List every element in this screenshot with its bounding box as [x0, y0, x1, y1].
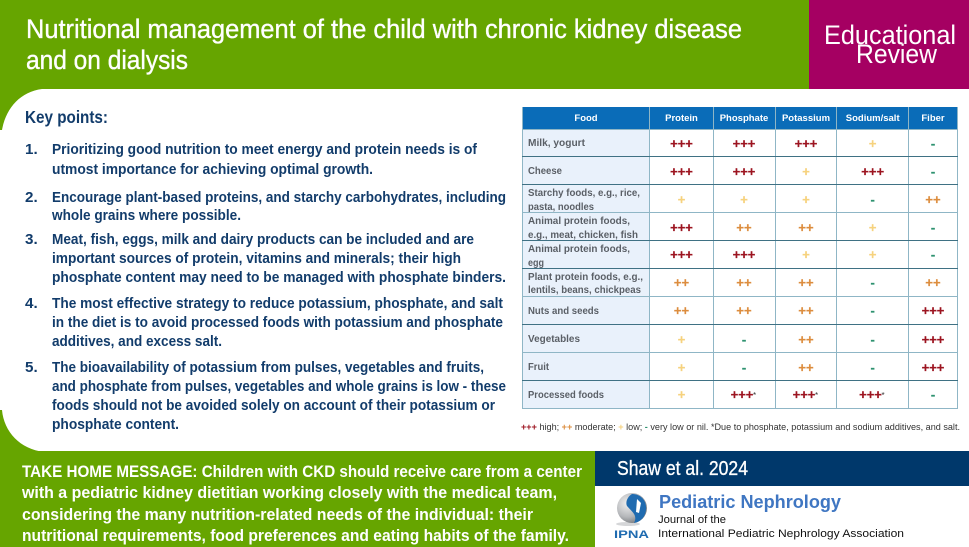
- table header row: [522, 107, 958, 129]
- table legend: +++ high; ++ moderate; + low; - very low or nil. *Due to phosphate, potassium and sodium additives, and salt.: [521, 422, 960, 432]
- key point 2: 2.: [25, 189, 38, 206]
- icon: IPNA globe: [616, 493, 647, 526]
- key point 2: Encourage plant-based proteins, and starchy carbohydrates, including: [52, 189, 506, 206]
- row: starchy foods: +: [802, 192, 810, 207]
- row: plant protein foods: lentils, beans, chickpeas: [528, 285, 642, 296]
- row: processed foods: +++: [859, 387, 882, 402]
- key point 5: 5.: [25, 359, 38, 376]
- row: milk, yogurt: [528, 136, 935, 151]
- row: nuts and seeds: ++: [736, 303, 752, 318]
- key point 3: phosphate content may need to be managed with phosphate binders.: [52, 269, 506, 286]
- row: animal protein foods, meat: [528, 216, 935, 241]
- heading: key points: Key points:: [25, 107, 108, 127]
- row: cheese: +++: [733, 164, 756, 179]
- panel: take home message: [0, 451, 595, 547]
- key point 5: The bioavailability of potassium from pulses, vegetables and fruits,: [52, 359, 484, 376]
- key point 1: 1.: [25, 141, 38, 158]
- row: plant protein foods: ++: [736, 275, 752, 290]
- row: processed foods: +++: [731, 387, 754, 402]
- panel: take home message: with a pediatric kidney dietitian working closely with the medical team,: [21, 483, 557, 502]
- row: plant protein foods: ++: [925, 275, 941, 290]
- panel: take home message: considering the many nutrition-related needs of the individual: their: [22, 505, 533, 524]
- journal logo: Pediatric Nephrology: [614, 491, 904, 541]
- row: nuts and seeds: -: [871, 303, 875, 318]
- text: IPNA: IPNA: [614, 529, 649, 541]
- key point 1: utmost importance for achieving optimal growth.: [52, 161, 373, 178]
- row: vegetables: +++: [922, 332, 945, 347]
- key point 3: Meat, fish, eggs, milk and dairy products can be included and are: [52, 231, 474, 248]
- row: starchy foods: Starchy foods, e.g., rice,: [528, 188, 640, 199]
- row: fruit: Fruit: [528, 362, 550, 373]
- row: animal protein foods, egg: egg: [528, 258, 544, 269]
- key point 3: important sources of protein, vitamins and minerals; their high: [52, 250, 461, 267]
- row: cheese: [528, 164, 935, 179]
- row: milk, yogurt: -: [931, 136, 935, 151]
- row: animal protein foods, meat: Animal protein foods,: [528, 216, 630, 227]
- header banner: [0, 0, 809, 89]
- row: processed foods: -: [931, 387, 935, 402]
- badge: Educational Review: Review: [856, 39, 938, 69]
- key point 5: [25, 359, 506, 433]
- row: fruit: [528, 360, 945, 375]
- row: processed foods: *: [815, 391, 818, 400]
- row: processed foods: +: [678, 387, 686, 402]
- row: animal protein foods, meat: +: [869, 220, 877, 235]
- title: [26, 14, 742, 75]
- text: journal subtitle: [658, 514, 904, 540]
- row: animal protein foods, meat: -: [931, 220, 935, 235]
- row: nuts and seeds: +++: [922, 303, 945, 318]
- badge: Educational Review: [809, 0, 969, 89]
- row: starchy foods: +: [678, 192, 686, 207]
- badge: Educational Review: Educational: [824, 20, 956, 50]
- row: fruit: +++: [922, 360, 945, 375]
- panel: key points: [25, 107, 506, 433]
- panel: take home message: TAKE HOME MESSAGE: Children with CKD should receive care from a center: [22, 462, 582, 481]
- text: journal subtitle: Journal of the: [658, 514, 726, 526]
- row: animal protein foods, egg: Animal protein foods,: [528, 244, 630, 255]
- row: plant protein foods: [528, 272, 941, 296]
- row: plant protein foods: Plant protein foods, e.g.,: [528, 272, 643, 283]
- row: nuts and seeds: Nuts and seeds: [528, 306, 600, 317]
- row: cheese: -: [931, 164, 935, 179]
- row: milk, yogurt: +++: [670, 136, 693, 151]
- citation bar: [595, 451, 969, 486]
- key point 4: additives, and excess salt.: [52, 333, 222, 350]
- row: milk, yogurt: +++: [733, 136, 756, 151]
- table header row: Food: [574, 113, 598, 124]
- row: fruit: -: [742, 360, 746, 375]
- row: animal protein foods, egg: +++: [670, 247, 693, 262]
- row: starchy foods: +: [740, 192, 748, 207]
- row: animal protein foods, egg: +: [869, 247, 877, 262]
- table header row: Phosphate: [720, 113, 768, 124]
- table header row: Protein: [665, 113, 698, 124]
- row: nuts and seeds: ++: [798, 303, 814, 318]
- row: nuts and seeds: [528, 303, 945, 318]
- key point 2: whole grains where possible.: [51, 207, 241, 224]
- row: nuts and seeds: ++: [674, 303, 689, 318]
- row: processed foods: Processed foods: [528, 390, 605, 401]
- key point 2: [25, 189, 506, 224]
- row: milk, yogurt: +: [869, 136, 877, 151]
- row: vegetables: [528, 332, 945, 347]
- row: milk, yogurt: +++: [795, 136, 818, 151]
- panel: take home message: nutritional requirements, food preferences and eating habits of the family.: [22, 526, 569, 545]
- key point 5: and phosphate from pulses, vegetables and whole grains is low - these: [52, 378, 506, 395]
- text: journal subtitle: International Pediatric Nephrology Association: [658, 528, 904, 540]
- row: cheese: +++: [670, 164, 693, 179]
- row: processed foods: *: [753, 391, 756, 400]
- row: vegetables: ++: [798, 332, 814, 347]
- key point 3: [25, 231, 506, 286]
- key point 4: [25, 295, 503, 350]
- row: animal protein foods, meat: e.g., meat, chicken, fish: [528, 230, 638, 241]
- row: plant protein foods: -: [871, 275, 875, 290]
- citation bar: Shaw et al. 2024: [617, 458, 748, 480]
- row: plant protein foods: ++: [674, 275, 689, 290]
- row: animal protein foods, egg: -: [931, 247, 935, 262]
- row: animal protein foods, meat: ++: [798, 220, 814, 235]
- row: plant protein foods: ++: [798, 275, 814, 290]
- text: journal name: Pediatric Nephrology: [659, 491, 842, 512]
- row: starchy foods: pasta, noodles: [528, 202, 595, 213]
- key point 1: [25, 141, 478, 178]
- row: vegetables: Vegetables: [528, 334, 581, 345]
- row: fruit: +: [678, 360, 686, 375]
- decorative green corners of the key points panel: [0, 89, 44, 452]
- key point 4: in the diet is to avoid processed foods with potassium and phosphate: [52, 314, 503, 331]
- row: animal protein foods, meat: +++: [670, 220, 693, 235]
- row: vegetables: -: [742, 332, 746, 347]
- row: vegetables: +: [678, 332, 686, 347]
- key point 5: phosphate content.: [52, 416, 179, 433]
- row: starchy foods: ++: [925, 192, 941, 207]
- row: processed foods: [528, 387, 935, 402]
- row: animal protein foods, egg: +: [802, 247, 810, 262]
- title: and on dialysis: [26, 45, 188, 75]
- row: fruit: -: [871, 360, 875, 375]
- row: cheese: +++: [861, 164, 884, 179]
- row: cheese: +: [802, 164, 810, 179]
- key point 1: Prioritizing good nutrition to meet energy and protein needs is of: [52, 141, 478, 158]
- key point 4: The most effective strategy to reduce potassium, phosphate, and salt: [52, 295, 503, 312]
- table header row: Fiber: [921, 113, 945, 124]
- row: processed foods: +++: [793, 387, 816, 402]
- table header row: Potassium: [782, 113, 830, 124]
- row: starchy foods: -: [871, 192, 875, 207]
- row: animal protein foods, egg: [528, 244, 935, 269]
- row: fruit: ++: [798, 360, 814, 375]
- row: animal protein foods, egg: +++: [733, 247, 756, 262]
- table header row: Sodium/salt: [846, 113, 900, 124]
- row: milk, yogurt: Milk, yogurt: [528, 138, 586, 149]
- row: cheese: Cheese: [528, 166, 563, 177]
- key point 4: 4.: [25, 295, 38, 312]
- row: starchy foods: [528, 188, 941, 213]
- table: food nutrient content: [522, 107, 958, 408]
- row: animal protein foods, meat: ++: [736, 220, 752, 235]
- key point 3: 3.: [25, 231, 38, 248]
- row: processed foods: *: [882, 391, 885, 400]
- key point 5: foods should not be avoided solely on account of their potassium or: [52, 397, 495, 414]
- title: Nutritional management of the child with chronic kidney disease: [26, 14, 742, 44]
- row: vegetables: -: [871, 332, 875, 347]
